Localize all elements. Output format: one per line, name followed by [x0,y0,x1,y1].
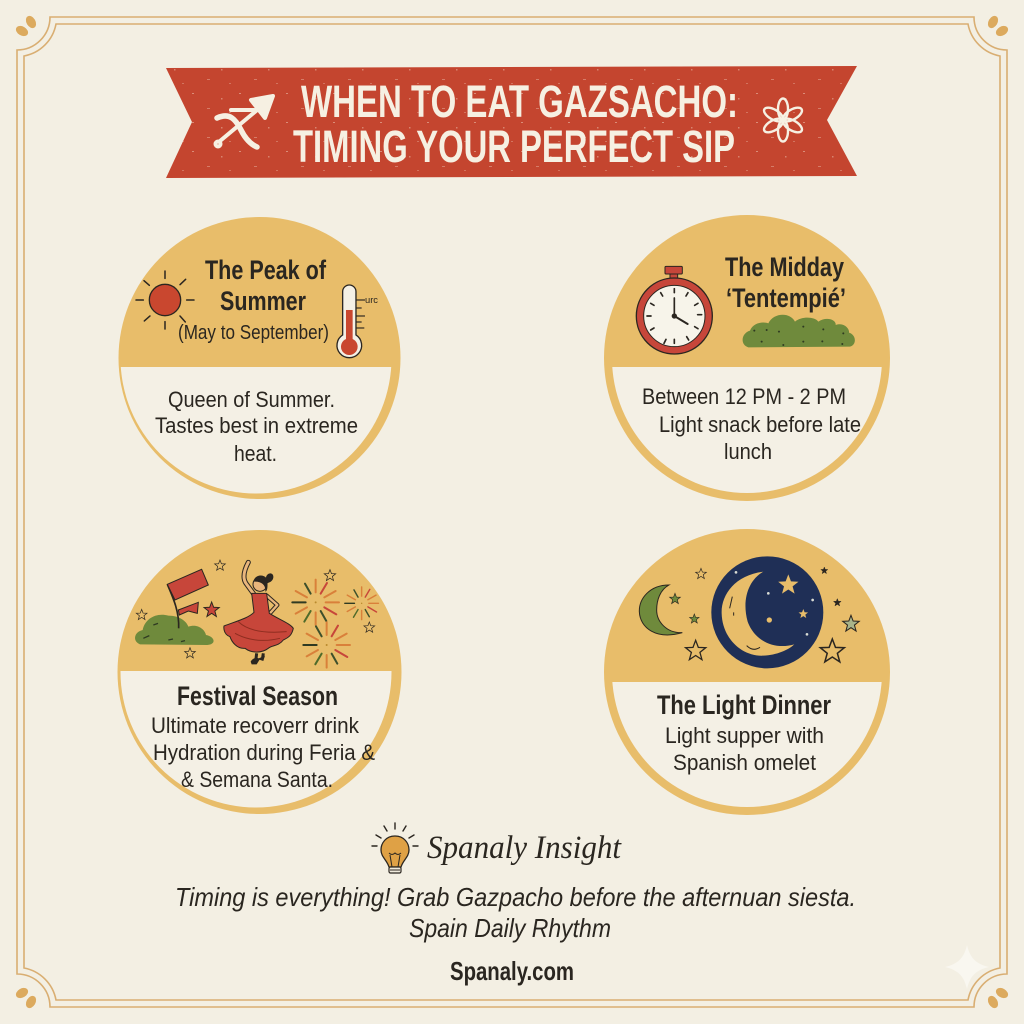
title banner [166,66,857,178]
icon: flamenco dancer [224,562,293,664]
insight text [175,882,856,943]
icon: stars [136,560,375,658]
body text: Queen of Summer. [168,387,335,412]
icon: thermometer [337,285,365,358]
body text [155,387,358,466]
body text: Light snack before late [659,412,861,437]
body text [642,384,861,464]
icon: green crescent [639,585,682,635]
icon: flower [762,98,804,142]
title text [293,76,738,172]
heading: ‘Tentempié’ [726,283,846,313]
icon: stars [670,567,859,662]
insight heading: Spanaly Insight [427,830,622,866]
heading [725,252,846,313]
heading: The Midday [725,252,844,282]
sparkle watermark [945,945,989,989]
insight text: Timing is everything! Grab Gazpacho before the afternuan siesta. [175,882,856,912]
body text: Light supper with [665,723,824,748]
heading: Festival Season [177,681,338,711]
icon: stopwatch [636,266,712,354]
panel: the light dinner [604,529,890,815]
body text [151,713,375,792]
website: Spanaly.com [450,956,574,986]
panel: the midday tentempie [604,215,890,501]
icon: shrub with flags [135,569,214,645]
icon: green shrub [743,315,855,347]
panel: festival season [118,530,402,814]
thermometer label: urc [365,295,379,305]
body text: Hydration during Feria & [153,740,375,765]
insight text: Spain Daily Rhythm [409,913,611,943]
heading: The Peak of [205,255,326,285]
icon: large moon in night disc [711,556,823,668]
icon: fireworks [292,580,378,668]
body text: lunch [724,439,772,464]
title text: WHEN TO EAT GAZSACHO: [301,76,738,127]
panel: the peak of summer [118,217,400,499]
body text: Between 12 PM - 2 PM [642,384,846,409]
heading [178,255,329,344]
heading: Summer [220,286,306,316]
body text: Tastes best in extreme [155,413,358,438]
title text: TIMING YOUR PERFECT SIP [293,121,735,172]
icon: sun [136,271,194,329]
icon: lightbulb [372,823,418,873]
body text: Ultimate recoverr drink [151,713,360,738]
body text: heat. [234,441,277,466]
body text [665,723,824,775]
icon: sagittarius arrow [216,96,273,147]
body text: Spanish omelet [673,750,817,775]
heading: The Light Dinner [657,690,831,720]
body text: & Semana Santa. [181,767,333,792]
heading: (May to September) [178,322,329,344]
